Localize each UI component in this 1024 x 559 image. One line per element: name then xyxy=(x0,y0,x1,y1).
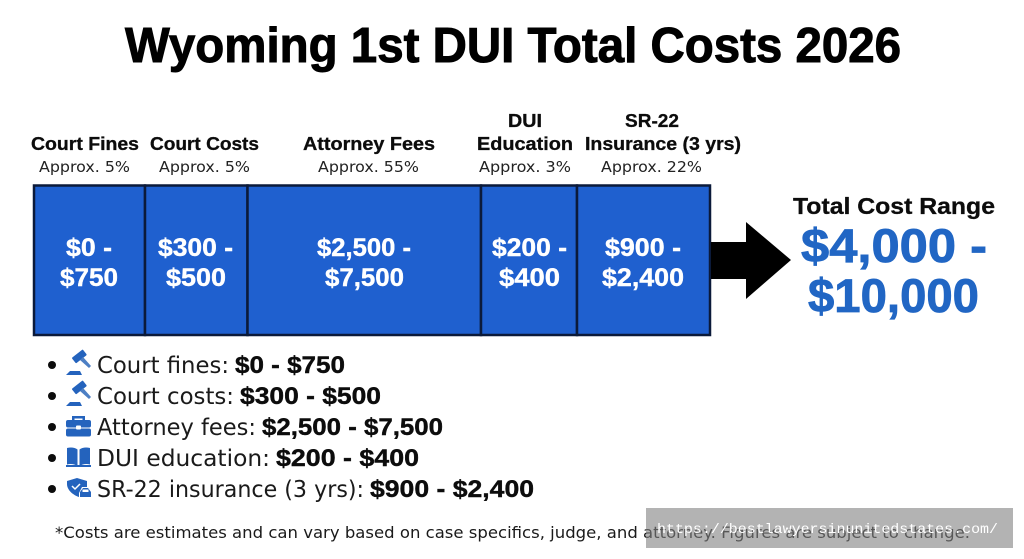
header: SR-22 insurance xyxy=(585,110,741,176)
segment: DUI education xyxy=(481,186,577,335)
segment: court costs: $500 xyxy=(166,264,226,292)
segment: attorney fees: $2,500 - xyxy=(317,234,411,262)
list item: DUI education: $200 - $400 xyxy=(276,445,419,472)
cost list xyxy=(48,349,534,503)
segment: SR-22 insurance xyxy=(577,186,710,335)
icon: shield and car xyxy=(67,478,91,497)
segment: attorney fees xyxy=(248,186,481,335)
list item: court fines: Court fines: xyxy=(97,353,229,379)
stacked cost bar xyxy=(34,186,710,335)
header: court fines: Approx. 5% xyxy=(39,158,130,176)
segment: court fines xyxy=(34,186,145,335)
total cost range: $10,000 xyxy=(808,269,979,322)
header: SR-22 insurance: Approx. 22% xyxy=(601,158,702,176)
icon: briefcase xyxy=(66,416,91,436)
list item: attorney fees: Attorney fees: xyxy=(97,415,256,441)
header: court costs: Approx. 5% xyxy=(159,158,250,176)
segment: court fines: $0 - xyxy=(66,234,112,262)
total cost range: $4,000 - xyxy=(801,219,987,272)
segment: court costs: $300 - xyxy=(158,234,233,262)
header: court costs xyxy=(150,133,259,176)
header: SR-22 insurance: SR-22 xyxy=(625,110,679,131)
list item: attorney fees: $2,500 - $7,500 xyxy=(262,414,443,441)
arrow xyxy=(711,222,791,299)
header: DUI education: Education xyxy=(477,133,573,154)
watermark: https://bestlawyersinunitedstates.com/ xyxy=(657,522,998,538)
column headers xyxy=(31,110,741,176)
list item: court fines: $0 - $750 xyxy=(235,352,345,379)
title: Wyoming 1st DUI Total Costs 2026 xyxy=(125,19,901,73)
header: attorney fees: Approx. 55% xyxy=(318,158,419,176)
icon: gavel xyxy=(66,380,91,406)
header: DUI education: Approx. 3% xyxy=(479,158,571,176)
watermark xyxy=(646,508,1013,548)
header: court fines xyxy=(31,133,139,176)
segment: SR-22 insurance: $2,400 xyxy=(602,264,684,292)
total cost range: Total Cost Range xyxy=(793,193,995,219)
segment: attorney fees: $7,500 xyxy=(325,264,404,292)
list item: court costs: Court costs: xyxy=(97,384,234,410)
icon: open book xyxy=(66,448,91,467)
footnote: *Costs are estimates and can vary based on case specifics, judge, and attorney. Figures are subject to change. xyxy=(55,523,970,542)
list item: SR-22 insurance: SR-22 insurance (3 yrs): xyxy=(97,477,364,503)
list item: court fines xyxy=(48,349,345,379)
segment: DUI education: $200 - xyxy=(492,234,567,262)
header: DUI education: DUI xyxy=(508,110,542,131)
list item: DUI education: DUI education: xyxy=(97,446,270,472)
segment: court costs xyxy=(145,186,248,335)
header: DUI education xyxy=(477,110,573,176)
segment: DUI education: $400 xyxy=(499,264,560,292)
icon: gavel xyxy=(66,349,91,375)
header: SR-22 insurance: Insurance (3 yrs) xyxy=(585,133,741,154)
header: attorney fees xyxy=(303,133,435,176)
segment: court fines: $750 xyxy=(60,264,118,292)
segment: SR-22 insurance: $900 - xyxy=(605,234,681,262)
list item: DUI education xyxy=(48,445,419,472)
total cost range xyxy=(793,193,995,322)
header: attorney fees: Attorney Fees xyxy=(303,133,435,154)
list item: attorney fees xyxy=(48,414,443,441)
list item: court costs: $300 - $500 xyxy=(240,383,381,410)
header: court costs: Court Costs xyxy=(150,133,259,154)
header: court fines: Court Fines xyxy=(31,133,139,154)
list item: SR-22 insurance: $900 - $2,400 xyxy=(370,476,534,503)
list item: SR-22 insurance xyxy=(48,476,534,503)
list item: court costs xyxy=(48,380,381,410)
